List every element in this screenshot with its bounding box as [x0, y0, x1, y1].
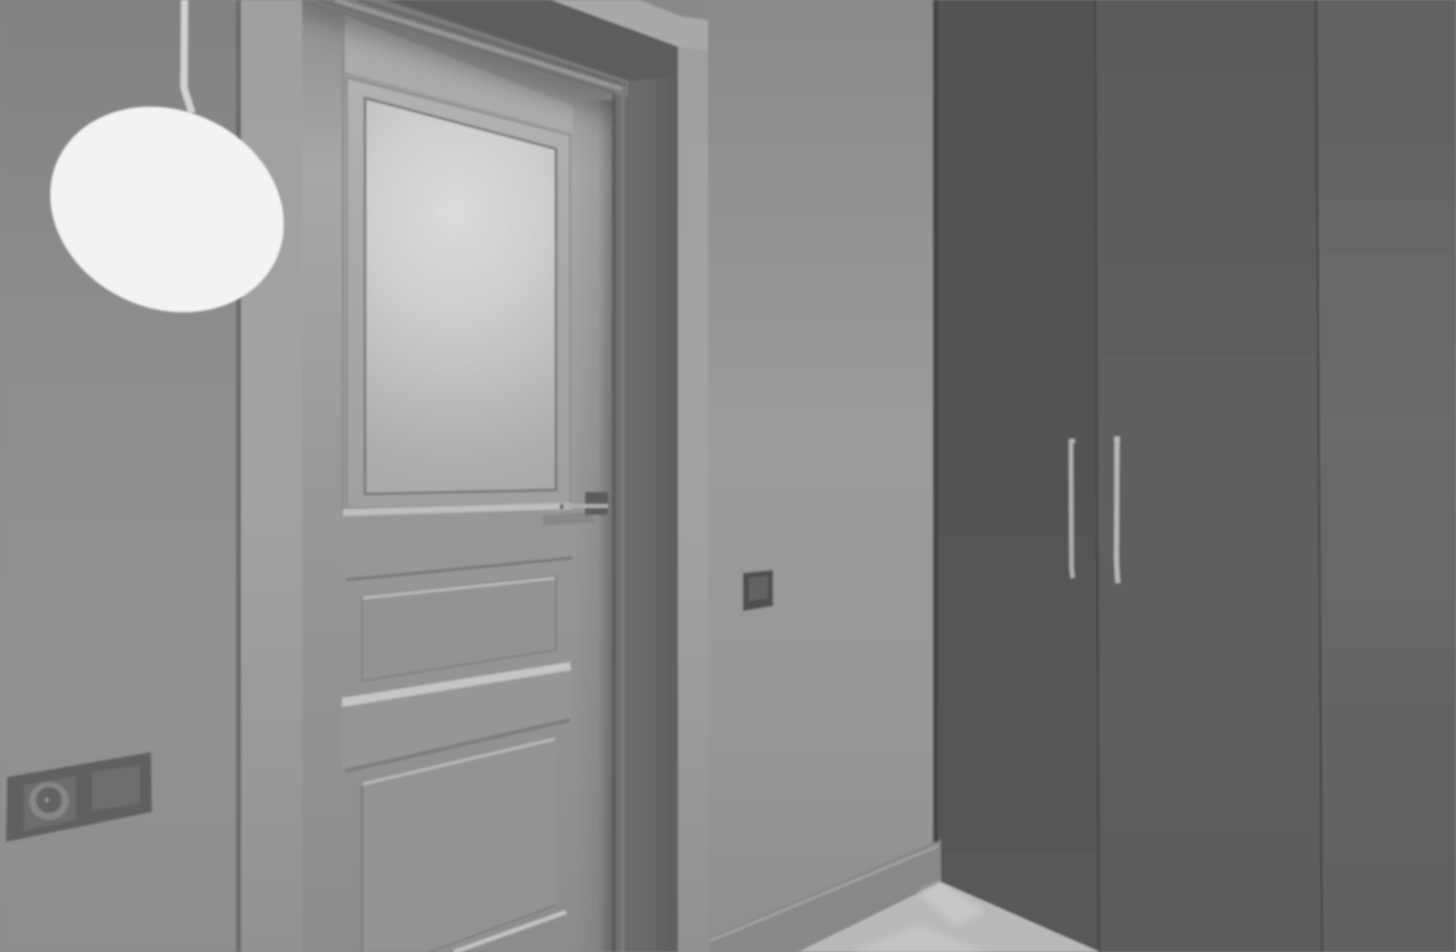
floor	[798, 882, 1100, 952]
left wardrobe handle	[1069, 441, 1075, 578]
middle rail highlight	[343, 503, 572, 516]
wardrobe middle door	[1096, 0, 1322, 952]
lower rail highlight	[342, 662, 571, 707]
wardrobe right door	[1317, 0, 1456, 952]
top rail of door	[345, 15, 573, 133]
baseboard	[710, 840, 941, 952]
door jamb	[612, 70, 680, 952]
right architrave	[553, 0, 708, 952]
bottom rail highlight	[454, 912, 566, 952]
upper panel	[365, 98, 556, 494]
right wardrobe handle	[1114, 439, 1120, 583]
jamb stop edges	[612, 85, 629, 952]
wardrobe seam right	[1316, 0, 1322, 952]
door leaf	[302, 0, 614, 952]
door leaf right shading	[572, 100, 614, 952]
lower rail	[342, 668, 571, 770]
door frame edge shadow	[236, 0, 241, 952]
left architrave	[241, 0, 302, 952]
bottom panel	[362, 739, 556, 952]
right wall	[705, 0, 937, 952]
door handle shadow	[543, 512, 596, 526]
wardrobe left door	[936, 0, 1100, 952]
wall socket plate	[6, 752, 152, 842]
middle rail	[343, 506, 572, 578]
lamp stem	[184, 0, 192, 113]
head moulding	[307, 0, 628, 97]
head shadow on door	[290, 0, 620, 100]
stile groove	[342, 40, 344, 510]
lamp globe	[17, 70, 317, 349]
wall light switch	[743, 570, 773, 611]
door head soffit	[385, 0, 679, 81]
door handle	[560, 492, 608, 515]
small panel	[362, 576, 556, 681]
lower rail shadow	[345, 720, 570, 771]
left wall	[0, 0, 242, 952]
wardrobe seam	[1095, 0, 1099, 952]
middle rail shadow	[346, 558, 572, 580]
upper panel moulding	[347, 78, 570, 508]
wardrobe corner edge	[933, 0, 938, 842]
